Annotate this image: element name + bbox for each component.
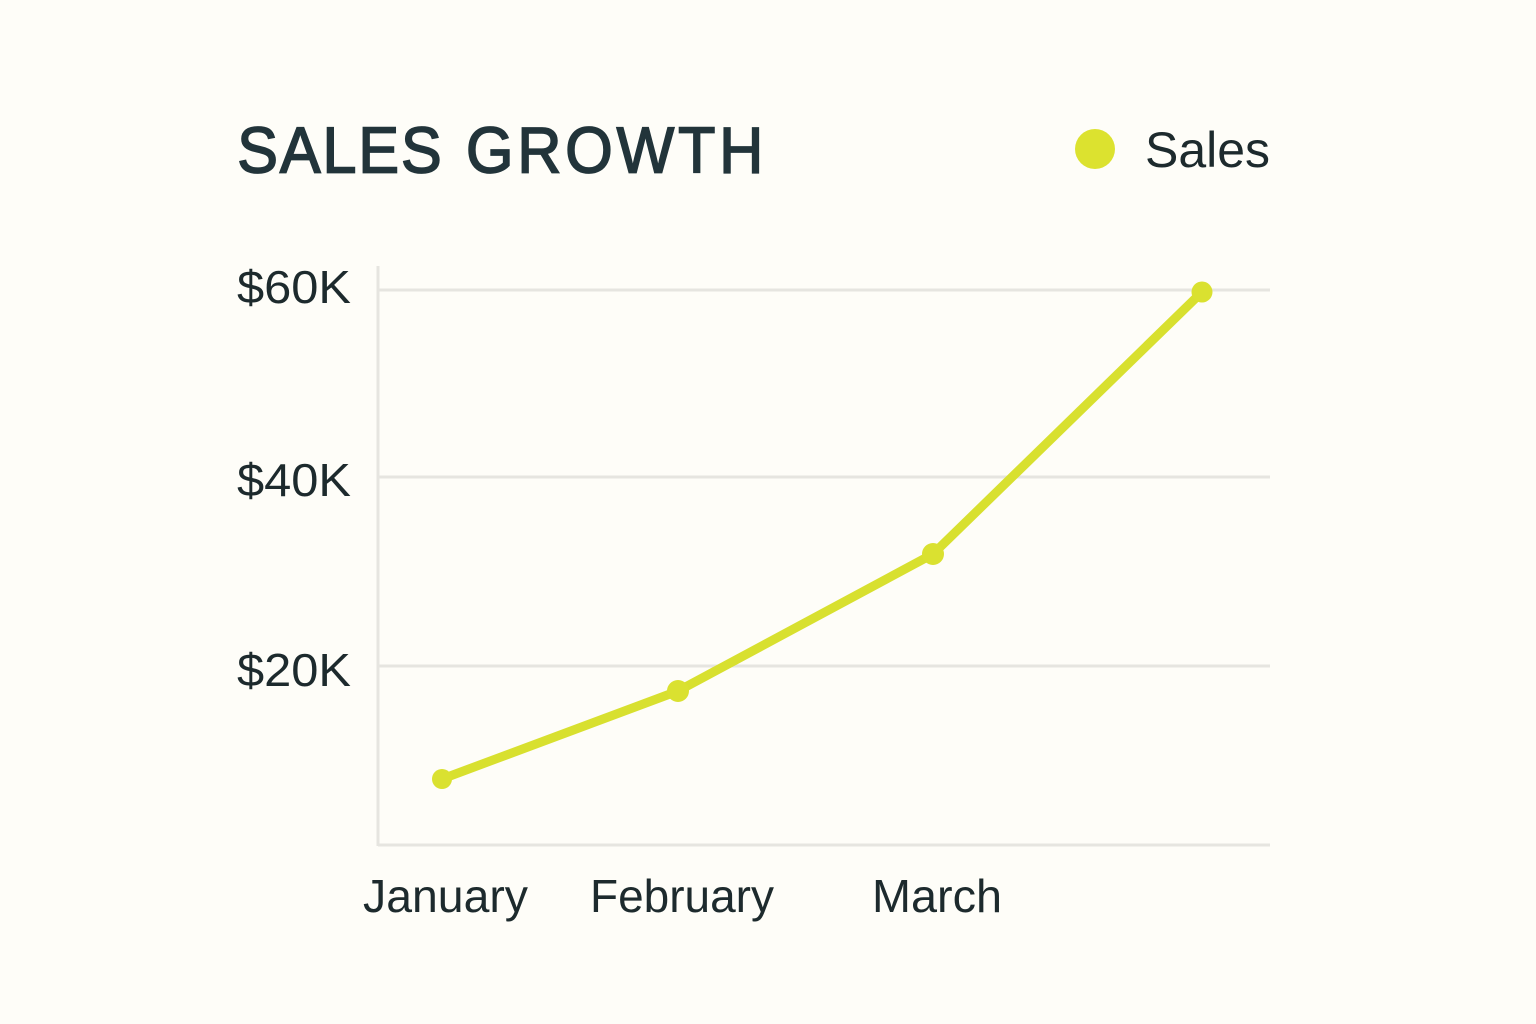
sales line: [432, 282, 1212, 789]
legend label: Sales: [1145, 122, 1270, 178]
legend: [1075, 122, 1270, 178]
x axis labels: [363, 870, 1002, 922]
y axis labels: [237, 261, 351, 696]
x axis labels: February: [590, 870, 774, 922]
legend marker: [1075, 129, 1115, 169]
x axis labels: January: [363, 870, 528, 922]
gridlines and axes: [378, 266, 1270, 846]
x axis labels: March: [872, 870, 1002, 922]
y axis labels: $60K: [237, 261, 351, 313]
y axis labels: $20K: [237, 644, 351, 696]
y axis labels: $40K: [237, 454, 351, 506]
data points: [432, 282, 1212, 789]
title: GROWTH: [466, 115, 767, 187]
title: SALES: [237, 115, 444, 187]
